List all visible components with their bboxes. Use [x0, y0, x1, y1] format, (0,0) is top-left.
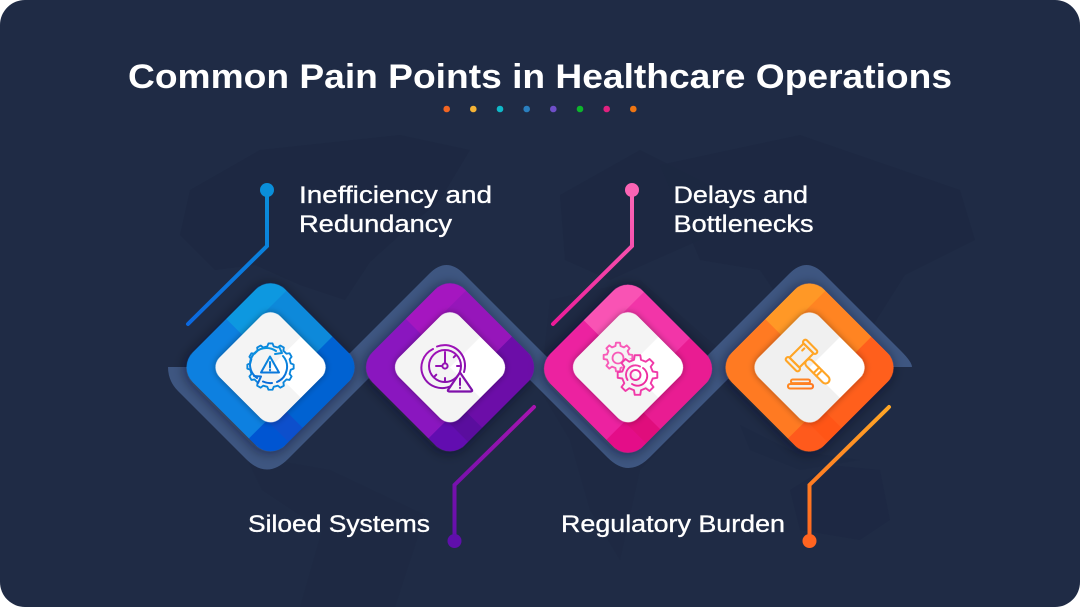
icon: gears — [604, 343, 657, 395]
decorative title dots — [443, 106, 637, 112]
icon: clock with warning — [421, 345, 472, 392]
label: delays and bottlenecks: Bottlenecks — [674, 211, 814, 238]
title: Common Pain Points in Healthcare Operations — [128, 58, 952, 96]
label: delays and bottlenecks — [674, 182, 814, 238]
diamond card: regulatory burden — [718, 278, 898, 456]
diamond card: inefficiency — [179, 281, 360, 459]
diamond card: delays — [537, 282, 716, 460]
icon: gavel — [785, 339, 839, 393]
zigzag connector band — [168, 265, 912, 470]
label: inefficiency and redundancy: Inefficiency and — [299, 182, 492, 209]
leader line: regulatory burden — [802, 407, 889, 548]
leader line: inefficiency — [188, 183, 274, 324]
label: inefficiency and redundancy: Redundancy — [299, 211, 453, 238]
label: siloed systems: Siloed Systems — [248, 511, 430, 538]
label: delays and bottlenecks: Delays and — [674, 182, 808, 209]
diamond card: siloed systems — [359, 278, 538, 456]
label: regulatory burden: Regulatory Burden — [561, 511, 785, 538]
leader line: siloed systems — [448, 407, 534, 548]
leader line: delays — [553, 183, 639, 324]
label: inefficiency and redundancy — [299, 182, 492, 238]
faint world map — [180, 135, 975, 607]
icon: gear with warning — [247, 343, 294, 390]
